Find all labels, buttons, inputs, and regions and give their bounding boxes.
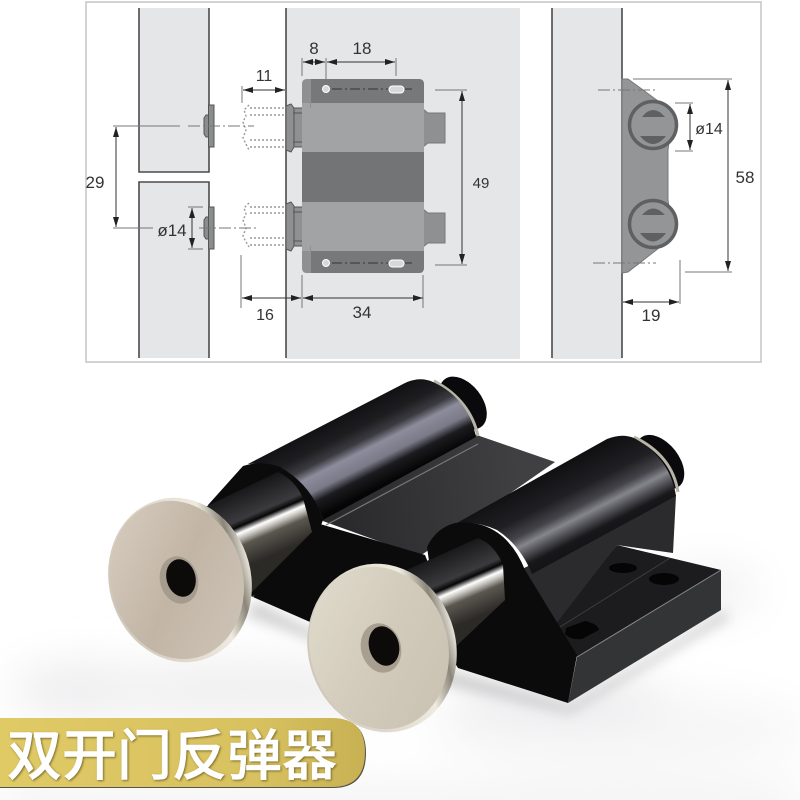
drawing frame	[86, 2, 761, 362]
dimension labels: 11	[256, 68, 272, 85]
center lines	[188, 90, 658, 265]
rear disc	[90, 481, 270, 679]
front housing	[427, 522, 577, 703]
rear latch chrome shaft	[205, 472, 312, 592]
front latch side wall	[520, 495, 676, 630]
plungers left	[286, 104, 303, 251]
dimension labels: 34	[353, 303, 371, 322]
top mounting strip	[310, 79, 424, 103]
dimension labels: ø14	[695, 121, 723, 138]
front disc	[289, 547, 475, 749]
dimension labels: 19	[642, 306, 660, 325]
shadow under latch	[245, 600, 730, 714]
mounting holes	[322, 86, 404, 267]
dimension labels: 8	[309, 39, 319, 58]
panel: left door sections	[139, 8, 209, 358]
front latch cylinder	[455, 436, 676, 574]
icon: dotted screw outlines	[243, 105, 285, 247]
base plate edge highlight	[577, 570, 721, 657]
dimension labels: 49	[473, 175, 489, 192]
rear latch lower body	[253, 524, 445, 622]
photo floor shadow	[0, 566, 800, 800]
front base plate face	[568, 570, 721, 703]
mounting holes	[565, 563, 679, 639]
bottom mounting strip	[310, 251, 424, 273]
dimension labels: ø14	[157, 221, 187, 240]
rear latch ring	[434, 381, 478, 436]
rear latch cylinder	[248, 379, 476, 520]
icon: front view of double latch	[286, 79, 445, 273]
panel: middle cabinet section	[286, 8, 520, 359]
title banner	[0, 718, 366, 788]
title text: 双开门反弹器	[7, 725, 337, 787]
icon: door strike plates	[204, 105, 214, 249]
rear latch base plate	[320, 432, 555, 556]
product photo: double door rebound latch	[90, 368, 730, 749]
plate ridge	[560, 558, 670, 627]
plate edge highlight	[326, 444, 478, 525]
dimension labels: 29	[86, 173, 104, 192]
banner pill	[0, 719, 366, 788]
dimension labels: 16	[256, 307, 274, 324]
rear housing arch	[208, 463, 323, 597]
icon: side view of latch	[622, 79, 676, 273]
front base plate top	[555, 545, 721, 657]
dimension labels: 18	[353, 39, 371, 58]
front latch chrome shaft	[400, 538, 505, 650]
plungers right	[423, 109, 445, 247]
latch body	[302, 79, 424, 273]
front latch cap	[626, 426, 694, 498]
dimension lines	[113, 58, 732, 308]
dimension labels	[86, 39, 754, 325]
central band	[302, 152, 424, 202]
dimension labels: 58	[736, 168, 754, 187]
panel: right cabinet section	[552, 8, 622, 359]
technical drawing panel	[86, 2, 761, 362]
front latch ring	[634, 437, 678, 492]
left body edge	[302, 79, 311, 273]
rear latch cap	[430, 368, 496, 438]
